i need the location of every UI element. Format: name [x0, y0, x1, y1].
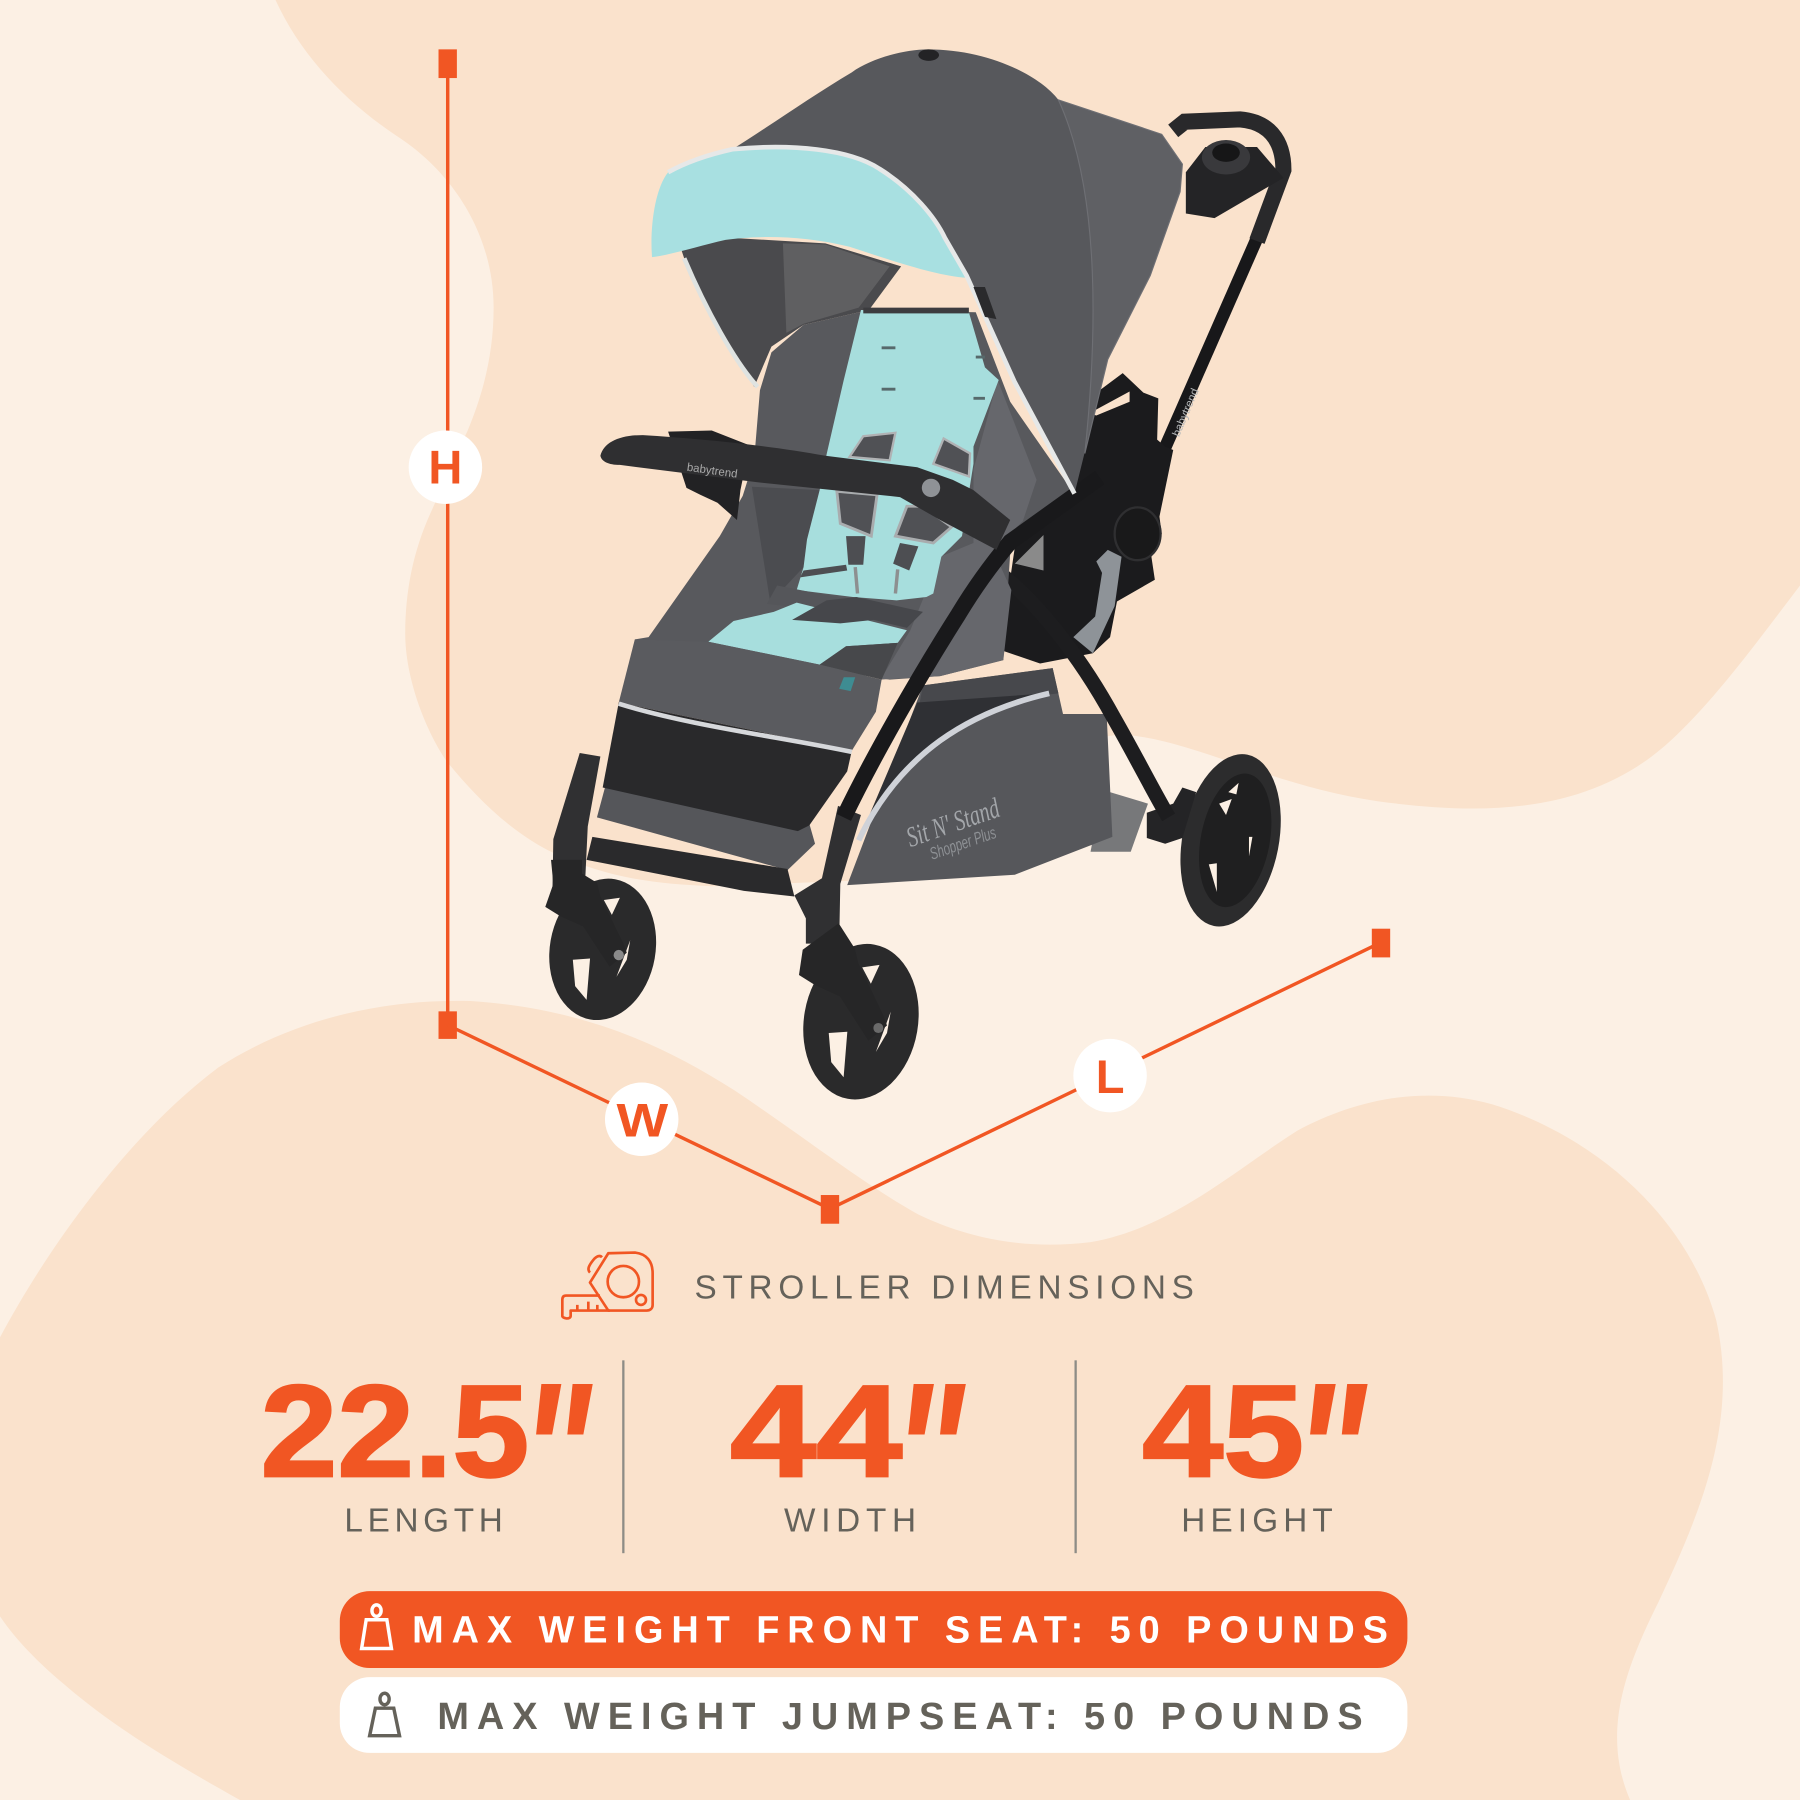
stat: length [261, 1340, 593, 1567]
rear footboard [1091, 790, 1148, 852]
seat back mint pad [797, 310, 999, 600]
seat pad slots [882, 348, 985, 398]
seat body [635, 310, 1076, 680]
harness [767, 433, 970, 613]
length dimension line [830, 929, 1390, 1209]
stat: length: 22.5 [261, 1358, 529, 1504]
icon: white weight [362, 1605, 391, 1648]
divider one [622, 1360, 624, 1553]
stat: height: " [1294, 1340, 1368, 1567]
stat: height: 45 [1142, 1358, 1304, 1504]
front left leg [552, 753, 600, 907]
stat: width: 44 [730, 1358, 903, 1504]
stat: width [730, 1340, 966, 1567]
rear bag [1000, 373, 1173, 664]
tray and front bar [600, 430, 1010, 550]
length dimension line: L [1096, 1050, 1124, 1103]
pole brand mark: babytrend [1171, 387, 1202, 439]
canopy tag [973, 287, 996, 319]
gap above seat [886, 267, 968, 308]
stat: width: WIDTH [784, 1502, 916, 1539]
background blob: top [276, 0, 1800, 886]
brand script: Sit N' Stand [902, 792, 1004, 854]
storage basket [847, 668, 1112, 885]
mesh front panel [603, 703, 852, 831]
rear brace [1073, 550, 1122, 653]
rear wheel [1167, 745, 1295, 935]
top of seat back [863, 308, 969, 313]
stat: width: " [892, 1340, 966, 1567]
pill: max weight jumpseat: MAX WEIGHT JUMPSEAT: 50 POUNDS [437, 1696, 1363, 1738]
under-seat crossbar [587, 837, 794, 897]
dark cushion corner [820, 643, 898, 680]
icon: grey weight [370, 1693, 399, 1736]
footer logo [839, 677, 855, 691]
pill: max weight jumpseat [340, 1677, 1407, 1753]
buckle [792, 597, 923, 628]
pill: max weight front seat [340, 1591, 1407, 1668]
front left wheel [538, 860, 667, 1029]
height dimension line [409, 49, 482, 1039]
canopy inner shade [678, 238, 901, 387]
background blob: bottom [0, 1001, 1723, 1800]
front right wheel [791, 923, 930, 1109]
seat cushion mint [708, 603, 907, 665]
height dimension line: H [428, 440, 462, 493]
side mesh [1015, 535, 1043, 571]
stat: length: " [520, 1340, 593, 1567]
canopy hood [732, 49, 1182, 494]
bag handle opening [1089, 391, 1130, 416]
heading: stroller dimensions: STROLLER DIMENSIONS [695, 1269, 1194, 1306]
divider two [1074, 1360, 1077, 1553]
icon: tape measure [562, 1253, 653, 1318]
front panel piping [619, 704, 852, 752]
canopy inner edge trim [684, 258, 758, 387]
cup holder [1186, 140, 1283, 218]
canopy right panel [1058, 100, 1182, 453]
leg cover [619, 639, 882, 751]
rear strut [994, 569, 1169, 817]
width dimension line [448, 1025, 839, 1224]
tray and front bar: babytrend [686, 462, 738, 481]
canopy button [918, 49, 939, 61]
frame knob [1115, 507, 1161, 560]
width dimension line: W [616, 1093, 669, 1146]
stat: length: LENGTH [344, 1502, 503, 1539]
canopy rim trim [668, 147, 1074, 494]
rear axle bracket [1147, 788, 1196, 844]
canopy visor mint [651, 147, 967, 278]
lower front pad [597, 788, 815, 870]
main strut [844, 478, 1100, 817]
stroller photo illustration [538, 49, 1295, 1109]
seat back inner panel [752, 487, 820, 603]
storage basket: Shopper Plus [927, 822, 999, 864]
rear handle pole [1164, 233, 1259, 450]
seat right wing [880, 380, 1037, 680]
handlebar [1173, 119, 1283, 241]
front right leg [794, 806, 861, 944]
stat: height [1142, 1340, 1368, 1567]
canopy inner panel [783, 243, 890, 333]
stat: height: HEIGHT [1181, 1502, 1333, 1539]
pill: max weight front seat: MAX WEIGHT FRONT SEAT: 50 POUNDS [412, 1610, 1388, 1652]
